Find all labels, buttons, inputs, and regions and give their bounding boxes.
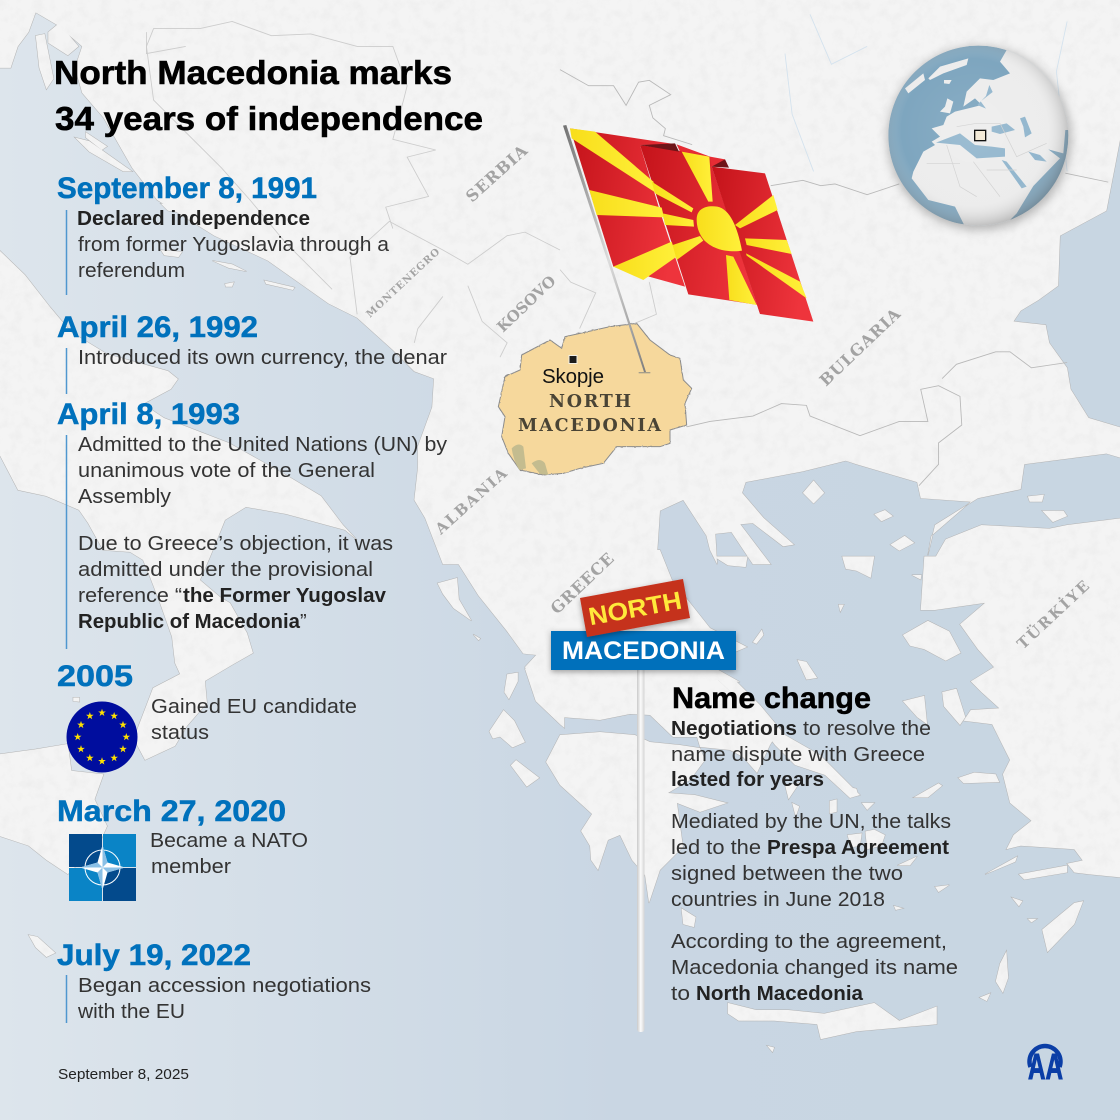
paragraph: negotiations: name dispute with Greece (671, 744, 925, 766)
blue sign: MACEDONIA (551, 631, 736, 670)
timeline: July 19, 2022: Began accession negotiations (78, 975, 371, 997)
paragraph: Prespa Agreement: Mediated by the UN, the talks (671, 811, 951, 833)
locator globe (888, 46, 1073, 230)
timeline: September 8, 1991: referendum (78, 260, 185, 282)
blue sign: MACEDONIA: MACEDONIA (562, 637, 725, 665)
paragraph: agreement: North Macedonia (696, 983, 864, 1005)
timeline: September 8, 1991: Declared independence (77, 208, 310, 230)
paragraph: agreement: According to the agreement, (671, 931, 947, 953)
paragraph: agreement: Macedonia changed its name (671, 957, 958, 979)
timeline: April 8, 1993: admitted under the provisional (78, 559, 373, 581)
timeline: April 8, 1993: Republic of Macedonia (78, 611, 301, 633)
paragraph: agreement: to (671, 983, 690, 1005)
date footer: September 8, 2025 (58, 1067, 189, 1083)
timeline: September 8, 1991: September 8, 1991 (57, 172, 317, 205)
timeline: September 8, 1991: from former Yugoslavia through a (78, 234, 390, 256)
map labels: country names: TÜRKİYE (1013, 576, 1093, 653)
map labels: country names: MONTENEGRO (365, 246, 442, 320)
title: 34 years of independence (55, 101, 483, 138)
title: North Macedonia marks (54, 55, 452, 92)
Flag of North Macedonia on a pole (563, 125, 813, 373)
locator square (975, 130, 986, 141)
timeline: March 27, 2020: March 27, 2020 (57, 795, 286, 828)
timeline: April 8, 1993: the Former Yugoslav (183, 585, 387, 607)
timeline: April 8, 1993: ” (300, 611, 307, 633)
timeline: July 19, 2022 (57, 939, 371, 1023)
timeline: July 19, 2022: July 19, 2022 (57, 939, 251, 972)
paragraph: agreement (671, 931, 958, 1005)
timeline: 2005: status (151, 722, 209, 744)
map labels: country names: GREECE (547, 549, 618, 618)
paragraph: negotiations: to resolve the (803, 718, 931, 740)
paragraph: Prespa Agreement: signed between the two (671, 863, 903, 885)
red sign: NORTH: NORTH (586, 587, 684, 631)
Anadolu Agency logo: AA (1028, 1046, 1063, 1087)
country label (518, 392, 661, 436)
timeline: March 27, 2020: member (151, 856, 231, 878)
paragraph: negotiations: lasted for years (671, 769, 824, 791)
paragraph: negotiations: Negotiations (671, 718, 797, 740)
paragraph: Prespa Agreement (671, 811, 951, 911)
timeline: April 26, 1992 (57, 311, 447, 394)
timeline: April 8, 1993: Admitted to the United Nations (UN) by (78, 434, 447, 456)
paragraph: Prespa Agreement: led to the (671, 837, 761, 859)
timeline: April 26, 1992: Introduced its own currency, the denar (78, 347, 447, 369)
icon: NATO flag (69, 834, 136, 901)
timeline: March 27, 2020: Became a NATO (150, 830, 308, 852)
timeline: April 8, 1993: Due to Greece’s objection, it was (78, 533, 393, 555)
Skopje label: Skopje (542, 365, 604, 388)
North Macedonia highlighted country (498, 323, 692, 475)
capital marker (569, 356, 577, 364)
map labels: country names (365, 141, 1093, 653)
heading: Name change (672, 682, 871, 715)
timeline: 2005: Gained EU candidate (151, 696, 357, 718)
red sign: NORTH (580, 579, 690, 637)
icon: EU flag (66, 702, 138, 772)
paragraph: negotiations (671, 718, 931, 791)
timeline: April 8, 1993 (57, 398, 447, 649)
sign post (637, 665, 644, 1032)
map labels: country names: BULGARIA (816, 304, 904, 390)
flag cloth (570, 128, 813, 322)
timeline: April 8, 1993: April 8, 1993 (57, 398, 240, 431)
country label: NORTH (549, 392, 631, 412)
name change panel (671, 682, 958, 1005)
timeline: July 19, 2022: with the EU (77, 1001, 185, 1023)
map labels: country names: ALBANIA (431, 464, 511, 539)
paragraph: Prespa Agreement: countries in June 2018 (671, 889, 885, 911)
timeline: September 8, 1991 (57, 172, 390, 295)
signpost (551, 579, 736, 1032)
title (54, 55, 483, 138)
map labels: country names: SERBIA (462, 141, 532, 206)
paragraph: Prespa Agreement: Prespa Agreement (767, 837, 949, 859)
timeline: March 27, 2020 (57, 795, 308, 901)
country label: MACEDONIA (518, 416, 661, 436)
timeline: 2005: 2005 (57, 660, 133, 693)
Anadolu Agency logo (1028, 1046, 1063, 1087)
timeline: 2005 (57, 660, 357, 772)
timeline: April 26, 1992: April 26, 1992 (57, 311, 258, 344)
timeline: April 8, 1993: reference “ (78, 585, 182, 607)
timeline: April 8, 1993: unanimous vote of the General (78, 460, 375, 482)
flag pole (563, 125, 646, 372)
timeline: April 8, 1993: Assembly (78, 486, 171, 508)
map labels: country names: KOSOVO (493, 272, 559, 336)
